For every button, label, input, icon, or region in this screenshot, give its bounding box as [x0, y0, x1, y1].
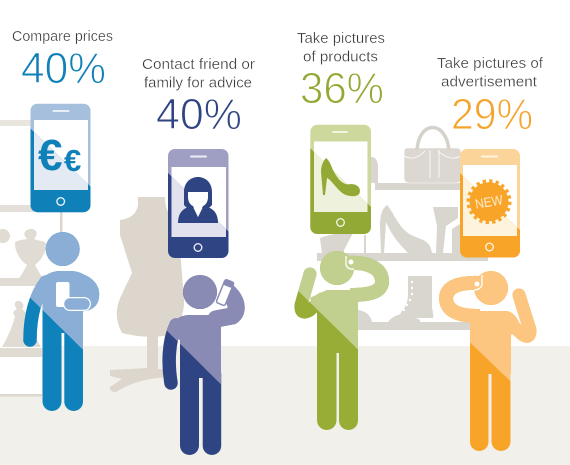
left display shelves [0, 120, 46, 396]
icon: new starburst: NEW [474, 192, 504, 212]
icon: camera phone [474, 275, 482, 290]
heading: pictures of products: of products [303, 50, 378, 66]
heading: pictures of advertisement: advertisement [441, 74, 537, 90]
icon: camera phone [346, 256, 354, 269]
icon: woman portrait [178, 177, 218, 223]
heading: pictures of products: Take pictures [297, 31, 385, 47]
heading: contact friend: family for advice [144, 76, 252, 92]
phone: euro prices [30, 104, 90, 212]
icon: euro signs: € [64, 143, 81, 178]
icon: euro signs [38, 131, 81, 180]
person: blue with phone in hand [30, 232, 93, 411]
heading: pictures of advertisement: Take pictures of [437, 56, 544, 72]
icon: hand phone [56, 282, 70, 307]
mannequin [117, 197, 184, 337]
right shelves with products [317, 128, 488, 330]
mannequin stand [110, 334, 176, 392]
number: 36%: 36% [300, 64, 384, 113]
phone: woman contact [168, 149, 228, 258]
connector line phone 1 [60, 212, 62, 232]
icon: phone at ear [216, 279, 234, 306]
number: 40% compare prices: 40% [21, 44, 106, 93]
person: green taking picture [301, 251, 382, 430]
person: navy calling [169, 275, 236, 455]
phone: shoe picture [310, 125, 371, 234]
phone: new advertisement [460, 149, 520, 258]
icon: euro signs: € [38, 131, 62, 180]
heading: contact friend: Contact friend or [142, 57, 255, 73]
icon: high heel shoe [321, 158, 360, 196]
heading: contact friend [142, 57, 255, 92]
person: orange taking picture [446, 271, 530, 451]
number: 40% contact friend: 40% [156, 90, 242, 139]
heading: pictures of advertisement [437, 56, 544, 90]
number: 29%: 29% [451, 90, 533, 139]
heading: pictures of products [297, 31, 385, 66]
floor [0, 346, 570, 465]
heading: compare prices: Compare prices [12, 29, 113, 45]
